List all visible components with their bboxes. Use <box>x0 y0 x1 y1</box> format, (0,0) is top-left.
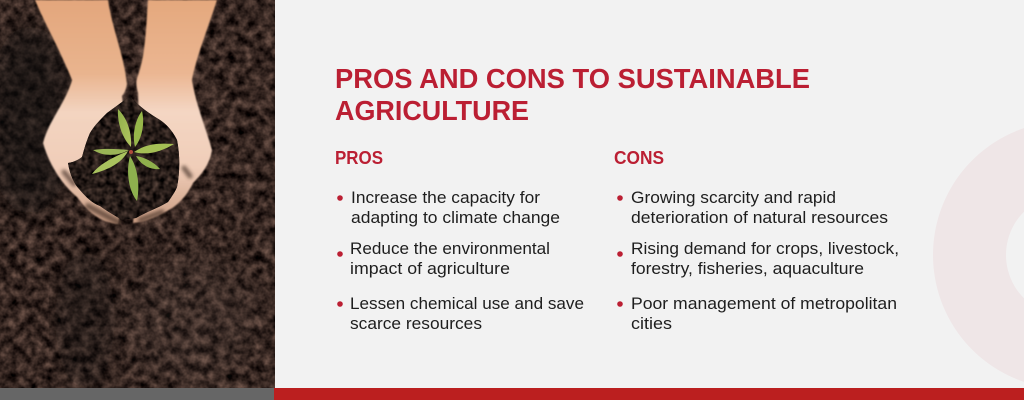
pro item 3 <box>337 295 584 333</box>
decorative ring <box>933 121 1024 389</box>
pro item 3: Lessen chemical use and save <box>350 295 584 313</box>
cons list <box>617 189 899 333</box>
dirt on fingertips <box>64 168 190 222</box>
pro item 1: adapting to climate change <box>351 209 560 227</box>
title <box>335 63 810 126</box>
pros list <box>337 189 584 333</box>
bottom bar: gray <box>0 388 274 400</box>
photo: hands holding seedling in soil <box>0 0 275 390</box>
left arm and hand <box>35 0 130 224</box>
soil mound in palms <box>68 96 180 220</box>
con item 1: deterioration of natural resources <box>631 209 888 227</box>
bottom bar: red <box>274 388 1024 400</box>
heading: cons: CONS <box>614 148 664 168</box>
pro item 1: Increase the capacity for <box>351 189 541 207</box>
con item 1: Growing scarcity and rapid <box>631 189 836 207</box>
con item 2: Rising demand for crops, livestock, <box>631 240 899 258</box>
con item 1 <box>617 189 888 227</box>
right arm and hand <box>133 0 217 223</box>
title: PROS AND CONS TO SUSTAINABLE <box>335 63 810 94</box>
pro item 2: Reduce the environmental <box>350 240 550 258</box>
pro item 1 <box>337 189 560 227</box>
con item 3: Poor management of metropolitan <box>631 295 897 313</box>
con item 2: forestry, fisheries, aquaculture <box>631 260 864 278</box>
con item 3 <box>617 295 897 333</box>
title: AGRICULTURE <box>335 95 529 126</box>
con item 2 <box>617 240 899 278</box>
seedling <box>92 109 174 201</box>
pro item 2 <box>337 240 550 278</box>
heading: pros: PROS <box>335 148 383 168</box>
pro item 3: scarce resources <box>350 315 482 333</box>
con item 3: cities <box>631 315 672 333</box>
pro item 2: impact of agriculture <box>350 260 510 278</box>
